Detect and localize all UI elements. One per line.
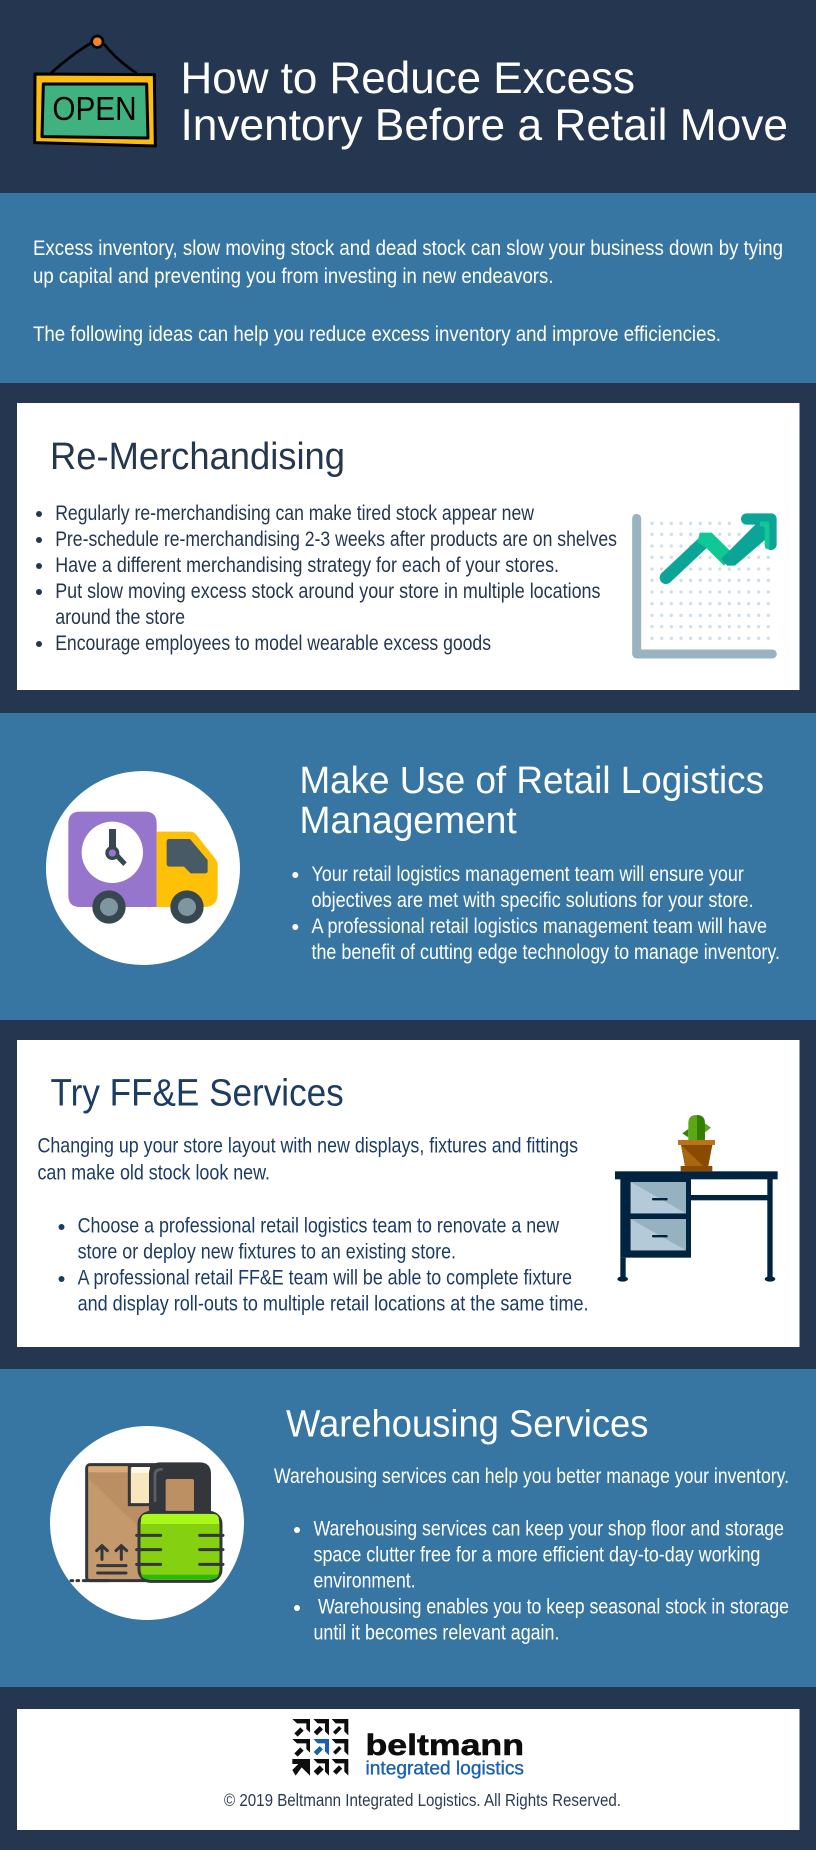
copyright: © 2019 Beltmann Integrated Logistics. All Rights Reserved. [224,1790,621,1810]
heading: retail logistics management: Management [300,800,517,842]
bullet list: re-merchandising: Put slow moving excess stock around your store in multiple locations [55,579,600,603]
bullet list: retail logistics [292,862,780,964]
heading: retail logistics management [300,760,764,842]
panel: re-merchandising [17,403,800,690]
text block: intro: The following ideas can help you reduce excess inventory and improve efficiencies. [33,322,721,346]
icon: growth chart [637,518,773,654]
heading: retail logistics management: Make Use of Retail Logistics [300,760,764,802]
bullet list: warehousing: environment. [314,1569,416,1593]
text block: FF&E intro [38,1134,578,1185]
icon: arrow grid [292,1719,348,1776]
panel: retail logistics management [0,713,816,1020]
bullet list: FF&E: Choose a professional retail logistics team to renovate a new [78,1214,559,1238]
wordmark: beltmann: beltmann [366,1729,524,1762]
text block: intro [33,236,783,346]
text block: FF&E intro: can make old stock look new. [38,1161,270,1185]
title [180,53,788,150]
bullet list: FF&E: store or deploy new fixtures to an existing store. [78,1240,456,1264]
title: How to Reduce Excess [180,53,635,103]
bullet list: re-merchandising: around the store [55,605,185,629]
icon: box with padlock [50,1426,244,1620]
panel: footer [17,1709,800,1830]
panel: FF&E services [17,1040,800,1347]
panel: introduction [0,193,816,383]
bullet list: re-merchandising [36,501,617,655]
icon: desk with cactus [615,1115,778,1282]
panel: warehousing services [0,1369,816,1687]
bullet list: re-merchandising: Have a different merchandising strategy for each of your stores. [55,553,559,577]
text block: FF&E intro: Changing up your store layout with new displays, fixtures and fittings [38,1134,578,1158]
heading: re-merchandising: Re-Merchandising [50,436,345,478]
icon: delivery truck with clock [46,771,240,965]
bullet list: FF&E [58,1214,588,1316]
icon: open sign [35,35,155,146]
heading: FF&E services: Try FF&E Services [50,1072,344,1114]
bullet list: FF&E: and display roll-outs to multiple retail locations at the same time. [78,1292,588,1316]
text block: intro: up capital and preventing you from investing in new endeavors. [33,264,554,288]
heading: warehousing services: Warehousing Services [286,1404,648,1446]
panel: header [0,0,816,193]
bullet list: FF&E: A professional retail FF&E team will be able to complete fixture [78,1266,572,1290]
bullet list: warehousing: until it becomes relevant again. [314,1621,559,1645]
bullet list: re-merchandising: Pre-schedule re-merchandising 2-3 weeks after products are on shelves [55,527,617,551]
icon: open sign: OPEN [52,91,137,128]
logo: beltmann integrated logistics [292,1719,524,1780]
title: Inventory Before a Retail Move [180,100,788,150]
bullet list: retail logistics: Your retail logistics management team will ensure your [312,862,744,886]
bullet list: re-merchandising: Encourage employees to model wearable excess goods [55,631,491,655]
wordmark: integrated logistics: integrated logistics [366,1758,524,1780]
bullet list: re-merchandising: Regularly re-merchandising can make tired stock appear new [55,501,534,525]
bullet list: warehousing [294,1517,789,1645]
